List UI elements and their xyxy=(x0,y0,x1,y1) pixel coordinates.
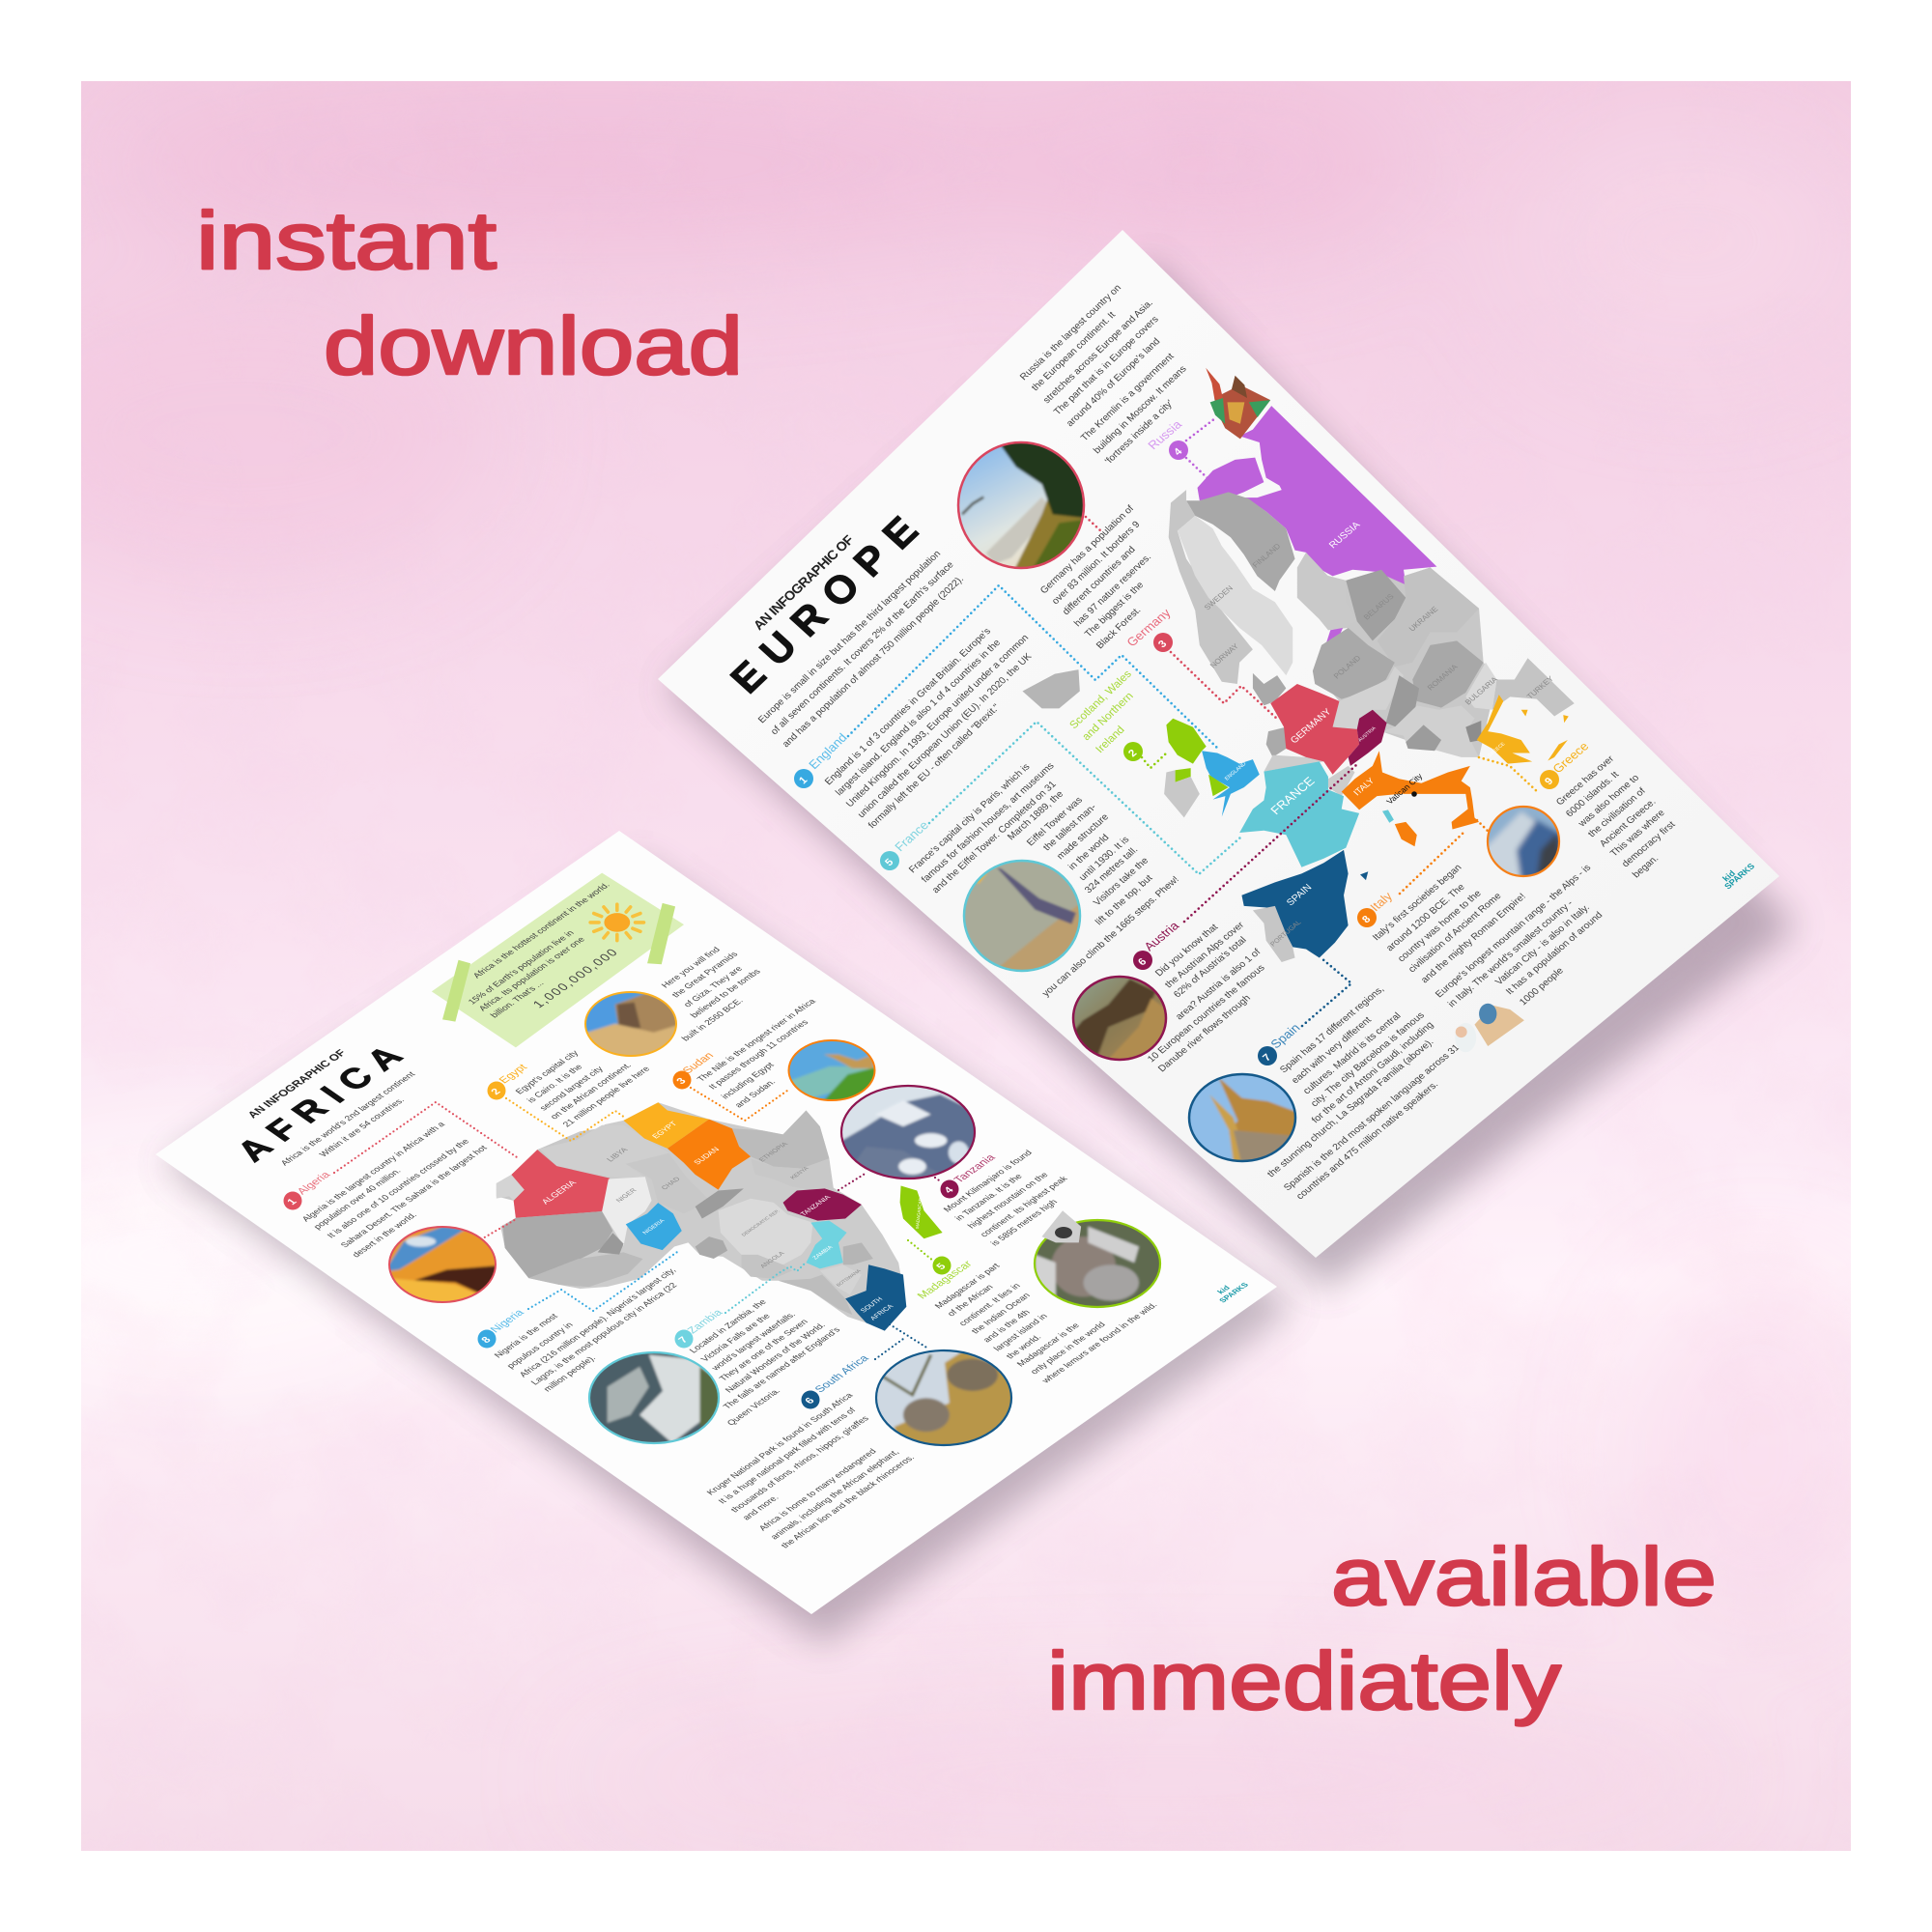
country: Madagascar xyxy=(900,1185,943,1238)
note text: Africa. Its population is over one xyxy=(476,935,586,1012)
Germany text: has 97 nature reserves. xyxy=(1072,552,1153,629)
Nigeria section: 8 xyxy=(479,1335,494,1345)
South Africa section: Africa is home to many endangered xyxy=(756,1447,878,1532)
England section xyxy=(794,585,1219,831)
country: Spain xyxy=(1241,850,1349,957)
map labels: TURKEY xyxy=(1525,674,1556,700)
South Africa section: thousands of lions, rhinos, hippos, giraffes xyxy=(728,1414,871,1514)
Nigeria section: Nigeria xyxy=(489,1308,527,1335)
Nigeria section: million people). xyxy=(541,1353,598,1393)
map labels: ENGLAND xyxy=(1224,761,1248,781)
Africa map labels: BOTSWANA xyxy=(836,1268,863,1288)
icon: sun xyxy=(590,904,643,941)
Madagascar section: Madagascar is part xyxy=(932,1262,1002,1310)
photo: forest hills xyxy=(956,440,1086,570)
Pyramid text: believed to be tombs xyxy=(688,967,763,1019)
logo: Kid Sparks: SPARKS xyxy=(1722,862,1756,891)
Germany text: over 83 million. It borders 9 xyxy=(1050,520,1143,607)
England section: England is 1 of 3 countries in Great Britain. Europe's xyxy=(823,626,993,787)
photo: Sahara dune xyxy=(388,1226,497,1303)
Italy section: Italy xyxy=(1367,889,1396,914)
Zambia section: The falls are named after England's xyxy=(721,1325,842,1410)
Egypt section: on the African continent. xyxy=(548,1061,633,1121)
map labels: SWEDEN xyxy=(1203,583,1235,611)
Africa map xyxy=(497,1102,943,1331)
Africa intro text: Africa is the world's 2nd largest continent xyxy=(278,1070,417,1167)
Algeria section: population over 40 million. xyxy=(311,1167,403,1231)
Madagascar section: where lemurs are found in the wild. xyxy=(1039,1301,1159,1385)
Italy section: 1000 people xyxy=(1518,966,1566,1008)
Italy section xyxy=(1357,820,1605,1009)
Scotland callout xyxy=(1067,668,1166,768)
note text: billion. That's ... xyxy=(488,979,546,1019)
Tanzania section: 4 xyxy=(942,1185,957,1195)
map labels: ITALY xyxy=(1351,776,1376,797)
heading: instant download xyxy=(196,195,743,391)
Greece section: began. xyxy=(1631,854,1661,880)
note text: 15% of Earth's population live in xyxy=(466,928,576,1006)
Austria callout: the Austrian Alps cover xyxy=(1163,920,1247,990)
England section: United Kingdom. In 1993, Europe united under a common xyxy=(844,633,1031,810)
Africa map labels: SOUTH xyxy=(860,1296,885,1314)
country: France xyxy=(1239,761,1359,867)
logo: Kid Sparks: kid xyxy=(1215,1284,1232,1295)
country: Nigeria xyxy=(626,1203,682,1250)
logo: Kid Sparks: kid xyxy=(1720,868,1737,883)
France section: France's capital city is Paris, which is xyxy=(907,762,1033,875)
Europe intro text: and has a population of almost 750 million people (2022). xyxy=(781,574,966,750)
Africa map labels: EGYPT xyxy=(650,1120,679,1140)
South Africa section: It is a huge national park filled with tens of xyxy=(716,1406,858,1505)
Zambia section: Queen Victoria. xyxy=(724,1387,782,1427)
Tanzania section: in Tanzania. It is the xyxy=(952,1172,1024,1222)
Algeria section: Algeria xyxy=(296,1170,333,1197)
Zambia section: world's largest waterfalls. xyxy=(709,1310,797,1373)
Madagascar section xyxy=(908,1240,1159,1385)
Africa map labels: KENYA xyxy=(790,1166,810,1180)
Algeria section: Algeria is the largest country in Africa with a xyxy=(299,1120,447,1223)
Egypt section: Egypt's capital city xyxy=(513,1048,581,1095)
Tanzania section: highest mountain on the xyxy=(965,1171,1050,1230)
Russia text: The Kremlin is a government xyxy=(1079,352,1177,443)
South Africa section: the African lion and the black rhinoceros. xyxy=(779,1453,917,1549)
Sudan section: 3 xyxy=(674,1076,689,1086)
Africa map labels: LIBYA xyxy=(605,1146,630,1163)
Austria callout: Austria xyxy=(1141,919,1182,953)
map labels: BELARUS xyxy=(1362,592,1396,621)
England section: England xyxy=(806,730,850,772)
green note: population xyxy=(432,873,684,1047)
Germany callout xyxy=(1123,606,1277,719)
France section: made structure xyxy=(1055,811,1111,862)
photo: Pyramid of Giza xyxy=(584,991,677,1057)
Zambia section: Victoria Falls are the xyxy=(698,1312,772,1363)
map labels: ROMANIA xyxy=(1426,663,1460,692)
panel: Europe infographic sheet xyxy=(658,230,1779,1258)
England section: formally left the EU - often called "Brexit." xyxy=(867,702,1003,831)
photo: lemur xyxy=(1028,1210,1167,1313)
Madagascar section: 5 xyxy=(934,1262,949,1271)
heading: instant download: download xyxy=(324,300,743,391)
Egypt section: second largest city xyxy=(537,1065,606,1112)
Zambia section: They are one of the Seven xyxy=(717,1318,810,1382)
France section: in the world xyxy=(1066,833,1112,872)
South Africa section: Kruger National Park is found in South Africa xyxy=(704,1391,856,1496)
country: Tanzania xyxy=(783,1188,862,1221)
Spain section: Spain xyxy=(1267,1021,1303,1051)
Austria callout: 62% of Austria's total xyxy=(1172,935,1249,1000)
map labels: FRANCE xyxy=(1267,774,1318,817)
England section: union called the European Union (EU). In 2020, the UK xyxy=(856,651,1035,820)
map labels: AUSTRIA xyxy=(1357,725,1378,743)
Russia text: 'fortress inside a city' xyxy=(1103,398,1176,467)
Africa map labels: DEMOCRATIC REP. xyxy=(741,1209,781,1237)
Sudan section: including Egypt xyxy=(719,1061,776,1100)
France section: you can also climb the 1665 steps. Phew! xyxy=(1040,874,1181,999)
map labels: Vatican City xyxy=(1384,771,1425,806)
Russia text: building in Moscow. It means xyxy=(1092,364,1189,456)
Greece section: was also home to xyxy=(1576,773,1642,830)
Madagascar section: continent. It lies in xyxy=(956,1282,1022,1327)
country: Sudan xyxy=(668,1120,751,1190)
Egypt section: Egypt xyxy=(497,1063,530,1086)
Greece section: 6000 islands. It xyxy=(1564,770,1621,819)
Algeria section xyxy=(284,1102,520,1259)
Pyramid text: of Giza. They are xyxy=(681,965,745,1009)
map labels: PORTUGAL xyxy=(1269,920,1303,948)
Spain section: Spanish is the 2nd most spoken language across 31 xyxy=(1282,1042,1463,1193)
country: Germany xyxy=(1270,684,1359,775)
Egypt section xyxy=(487,1048,652,1141)
Austria callout: Danube river flows through xyxy=(1156,993,1253,1074)
Spain section: 7 xyxy=(1261,1052,1274,1064)
Africa map labels: AFRICA xyxy=(869,1303,895,1321)
Africa map labels: MADAGASCAR xyxy=(915,1197,923,1229)
Africa silhouette east xyxy=(580,1102,906,1331)
map labels: SPAIN xyxy=(1285,883,1314,908)
Spain section: cultures. Madrid is its central xyxy=(1301,1011,1404,1096)
Germany callout: Germany xyxy=(1123,606,1174,649)
Germany text: Black Forest. xyxy=(1094,606,1143,651)
Tanzania section: continent. Its highest peak xyxy=(978,1175,1069,1238)
France section: the tallest man- xyxy=(1041,803,1098,853)
Russia callout xyxy=(1145,417,1215,479)
country: Italy xyxy=(1342,751,1479,829)
Italy section: Italy's first societies began xyxy=(1371,863,1464,943)
Austria callout xyxy=(1133,764,1357,1074)
Egypt section: is Cairo. It is the xyxy=(525,1063,584,1104)
Scotland callout: 2 xyxy=(1126,748,1140,759)
Spain section: for the art of Antoni Gaudi, including xyxy=(1310,1020,1435,1125)
map labels: BULGARIA xyxy=(1463,675,1500,706)
Tanzania section: Mount Kilimanjaro is found xyxy=(941,1149,1034,1213)
Zambia section: Natural Wonders of the World. xyxy=(723,1321,827,1394)
Madagascar section: Madagascar is the xyxy=(1014,1321,1081,1368)
photo: giraffe xyxy=(788,1039,875,1101)
Italy section: civilisation of Ancient Rome xyxy=(1406,891,1504,975)
Greece section xyxy=(1479,739,1678,880)
heading: available immediately: immediately xyxy=(1047,1635,1561,1726)
country: Austria xyxy=(1349,710,1387,766)
Africa map labels: SUDAN xyxy=(692,1146,722,1166)
Russia text: around 40% of Europe's land xyxy=(1065,336,1162,429)
country: Scotland xyxy=(1166,719,1207,764)
Nigeria section: Africa (216 million people). Nigeria's largest city, xyxy=(517,1266,678,1378)
Africa intro text: Within it are 54 countries. xyxy=(317,1096,407,1158)
Germany text: Germany has a population of xyxy=(1038,503,1136,596)
Scotland callout: Ireland xyxy=(1094,724,1127,755)
Austria callout: 6 xyxy=(1136,956,1150,968)
Spain section: Spain has 17 different regions, xyxy=(1278,984,1386,1075)
South Africa section: animals, including the African elephant, xyxy=(768,1448,901,1541)
Africa map labels: NIGER xyxy=(615,1187,639,1204)
Germany text: The biggest is the xyxy=(1083,580,1147,639)
map labels: RUSSIA xyxy=(1327,520,1363,551)
France section: France xyxy=(892,818,931,854)
Sudan section: and Sudan. xyxy=(732,1078,778,1109)
Italy section: It has a population of around xyxy=(1504,910,1605,997)
Africa map labels: ETHIOPIA xyxy=(758,1141,790,1163)
Spain section: city. The city Barcelona is famous xyxy=(1309,1010,1427,1109)
France section: and the Eiffel Tower. Completed on 31 xyxy=(930,779,1059,895)
Russia text: Russia is the largest country on xyxy=(1018,283,1123,383)
France section: lift to the top, but xyxy=(1094,873,1155,927)
Europe intro text: of all seven continents. It covers 2% of the Earth's surface xyxy=(769,559,956,737)
Madagascar section: the Indian Ocean xyxy=(969,1292,1032,1335)
Austria callout: area? Austria is also 1 of xyxy=(1174,948,1264,1022)
Zambia section: Located in Zambia, the xyxy=(687,1297,768,1354)
Greece section: the civilisation of xyxy=(1586,786,1648,839)
Greece section: Greece has over xyxy=(1554,753,1617,808)
Madagascar section: Madagascar xyxy=(916,1259,975,1301)
country: Zambia xyxy=(806,1221,847,1268)
Sudan section: It passes through 11 countries xyxy=(706,1018,810,1091)
heading: available immediately xyxy=(1047,1531,1717,1726)
Zambia section: 7 xyxy=(676,1335,691,1345)
South Africa section: 6 xyxy=(803,1396,817,1406)
country: Iceland xyxy=(1022,669,1080,708)
Tanzania section: Tanzania xyxy=(952,1152,999,1185)
Italy section: Vatican City - is also in Italy. xyxy=(1493,902,1592,987)
Madagascar section: of the African xyxy=(945,1283,995,1318)
England section: 1 xyxy=(797,775,810,786)
country: South Africa xyxy=(845,1264,906,1331)
Spain section: countries and 475 million native speakers. xyxy=(1294,1080,1440,1202)
note text: 1,000,000,000 xyxy=(529,947,620,1010)
Italy section: 8 xyxy=(1360,914,1374,925)
Madagascar section: only place in the world xyxy=(1028,1321,1107,1376)
shadow: Europe sheet xyxy=(667,261,1797,1290)
Scotland callout: Scotland, Wales xyxy=(1067,668,1134,731)
Tanzania section: is 5895 metres high xyxy=(988,1198,1060,1247)
Africa title: AFRICA xyxy=(228,1039,411,1168)
Europe title: EUROPE xyxy=(722,508,926,701)
map labels: GERMANY xyxy=(1289,707,1334,746)
South Africa section xyxy=(704,1324,928,1549)
Russia callout: 4 xyxy=(1172,445,1185,458)
country: Greece xyxy=(1477,695,1532,764)
Algeria section: 1 xyxy=(285,1197,299,1207)
Scotland callout: and Northern xyxy=(1080,691,1136,743)
Africa map labels: ZAMBIA xyxy=(812,1245,835,1261)
Sudan section: The Nile is the longest river in Africa xyxy=(695,997,818,1083)
Sudan section: Sudan xyxy=(681,1051,717,1076)
note text: Africa is the hottest continent in the world. xyxy=(470,881,611,980)
photo: Eiffel Tower xyxy=(962,860,1082,972)
map labels: UKRAINE xyxy=(1407,605,1439,633)
note text xyxy=(466,881,620,1019)
Tanzania section xyxy=(838,1149,1069,1247)
photo: Austrian river xyxy=(1072,976,1167,1061)
Egypt section: 2 xyxy=(489,1087,503,1096)
Italy section: around 1200 BCE. The xyxy=(1384,882,1467,953)
Greece section: 9 xyxy=(1543,776,1556,787)
Africa map labels: NIGERIA xyxy=(642,1219,667,1236)
Austria callout: 10 European countries the famous xyxy=(1146,963,1267,1065)
map labels xyxy=(1203,520,1556,948)
Greece section: Greece xyxy=(1549,739,1592,776)
eastern Europe base xyxy=(1297,567,1496,757)
France section xyxy=(880,722,1240,999)
Nigeria section: Nigeria is the most xyxy=(492,1312,560,1359)
photo: elephants xyxy=(868,1345,1019,1451)
heading: available immediately: available xyxy=(1331,1531,1717,1622)
icon: Vatican and Pope xyxy=(1455,1004,1524,1052)
country: Algeria xyxy=(511,1150,610,1218)
Nigeria section xyxy=(477,1250,680,1393)
Russia text: stretches across Europe and Asia. xyxy=(1041,298,1155,406)
Africa map labels: CHAD xyxy=(661,1177,682,1191)
Pyramid text: Here you will find xyxy=(659,946,722,989)
photo: Kilimanjaro xyxy=(834,1080,981,1184)
Europe title: AN INFOGRAPHIC OF xyxy=(750,531,857,633)
country: Egypt xyxy=(623,1102,709,1149)
Russia text xyxy=(1018,283,1189,467)
France section: until 1930. It is xyxy=(1077,835,1132,883)
Nigeria section: Lagos, is the most populous city in Africa (22 xyxy=(528,1281,679,1386)
Russia callout: Russia xyxy=(1145,417,1185,452)
Pyramid text: built in 2560 BCE. xyxy=(679,997,745,1042)
Madagascar section: and is the 4th xyxy=(980,1308,1032,1344)
Russia text: the European continent. It xyxy=(1030,310,1118,393)
photo: Alps xyxy=(1486,806,1561,877)
Pyramid text: the Great Pyramids xyxy=(669,950,740,999)
Russia text: The part that is in Europe covers xyxy=(1052,314,1161,417)
Spain section: each with very different xyxy=(1290,1015,1374,1086)
tape left xyxy=(442,960,470,1022)
South Africa section: and more. xyxy=(740,1493,781,1521)
photo: Sagrada Familia xyxy=(1188,1072,1296,1163)
map labels: FINLAND xyxy=(1251,542,1283,569)
France section: March 1889, the xyxy=(1006,789,1066,842)
Greece section: This was where xyxy=(1608,808,1667,859)
logo: Kid Sparks: SPARKS xyxy=(1217,1281,1251,1304)
Africa silhouette west xyxy=(497,1125,663,1289)
Spain section xyxy=(1258,958,1463,1202)
icon: St Basil's Cathedral xyxy=(1206,368,1270,439)
Greece section: democracy first xyxy=(1620,819,1678,869)
Algeria section: Sahara Desert. The Sahara is the largest hot xyxy=(338,1144,489,1249)
Madagascar section: the world. xyxy=(1004,1333,1043,1360)
Zambia section: Zambia xyxy=(686,1308,725,1336)
Pyramid text xyxy=(659,946,763,1042)
Europe intro text: Europe is small in size but has the third largest population xyxy=(756,549,943,725)
France section: Visitors take the xyxy=(1092,856,1151,908)
Africa map labels: ANGOLA xyxy=(759,1250,786,1269)
Egypt section: 21 million people live here xyxy=(560,1065,652,1128)
Italy section: country was home to the xyxy=(1396,889,1484,964)
panel: Africa infographic sheet xyxy=(156,831,1277,1614)
France section: famous for fashion houses, art museums xyxy=(920,761,1057,885)
heading: instant download: instant xyxy=(196,195,497,286)
Africa map labels: ALGERIA xyxy=(539,1179,579,1206)
Spain section: the stunning church, La Sagrada Familia (above). xyxy=(1265,1037,1436,1179)
England section: largest island. England is also 1 of 4 countries in the xyxy=(834,638,1003,798)
Nigeria section: populous country in xyxy=(504,1321,575,1370)
Italy section: Europe's longest mountain range - the Alps - is xyxy=(1434,863,1593,1000)
France section: 5 xyxy=(883,857,895,868)
Germany text xyxy=(1038,503,1153,651)
shadow: Africa sheet xyxy=(164,860,1294,1644)
country: England xyxy=(1202,751,1260,817)
Africa title: AN INFOGRAPHIC OF xyxy=(246,1048,349,1121)
South Africa section: South Africa xyxy=(813,1353,872,1395)
tape right xyxy=(647,903,675,964)
Algeria section: It is also one of 10 countries crossed by the xyxy=(325,1137,471,1239)
France section: 324 metres tall. xyxy=(1083,845,1140,895)
Greece section: Ancient Greece. xyxy=(1598,797,1659,849)
Germany callout: 3 xyxy=(1156,639,1170,650)
country: Russia xyxy=(1198,406,1436,584)
Germany text: different countries and xyxy=(1061,545,1138,617)
Europe map xyxy=(1164,406,1575,962)
photo: Victoria Falls xyxy=(582,1347,725,1449)
map labels: NORWAY xyxy=(1208,641,1241,669)
Austria callout: Did you know that xyxy=(1153,923,1221,979)
Italy section: in Italy. The world's smallest country - xyxy=(1446,898,1576,1009)
Africa map labels xyxy=(539,1120,923,1321)
Forest to Germany connector xyxy=(1086,517,1101,531)
Zambia section xyxy=(674,1263,842,1427)
Madagascar section: largest island in xyxy=(991,1312,1049,1352)
map labels: POLAND xyxy=(1332,654,1363,680)
Italy section: and the mighty Roman Empire! xyxy=(1419,892,1528,985)
France section: Eiffel Tower was xyxy=(1025,795,1085,848)
Sudan section xyxy=(672,997,818,1121)
Algeria section: desert in the world. xyxy=(350,1210,418,1259)
Africa map labels: TANZANIA xyxy=(800,1194,833,1217)
map labels: GREECE xyxy=(1487,741,1507,758)
